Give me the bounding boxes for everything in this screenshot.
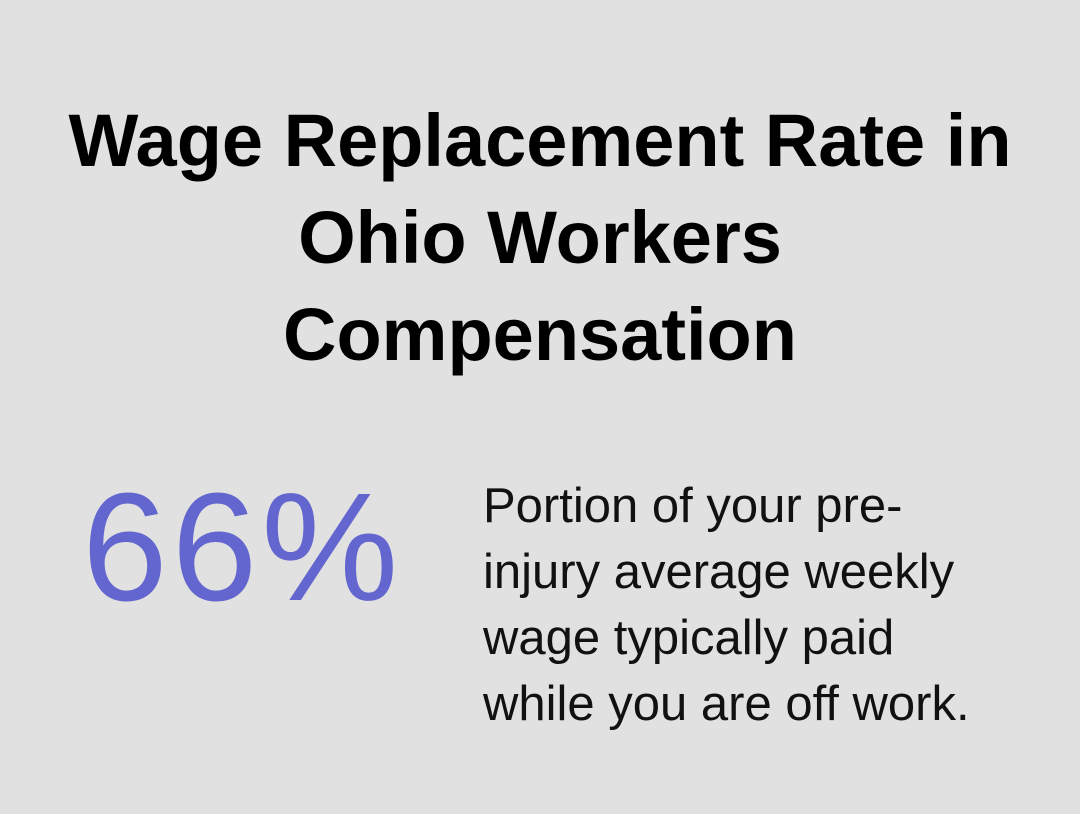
big statistic: 66% [82, 461, 402, 633]
title [68, 99, 1012, 376]
description text [483, 479, 970, 731]
description text: wage typically paid [483, 611, 894, 665]
description text: Portion of your pre- [483, 479, 902, 533]
title: Compensation [283, 293, 797, 376]
description text: while you are off work. [483, 677, 970, 731]
description text: injury average weekly [483, 545, 954, 599]
title: Ohio Workers [298, 196, 782, 279]
title: Wage Replacement Rate in [68, 99, 1012, 182]
